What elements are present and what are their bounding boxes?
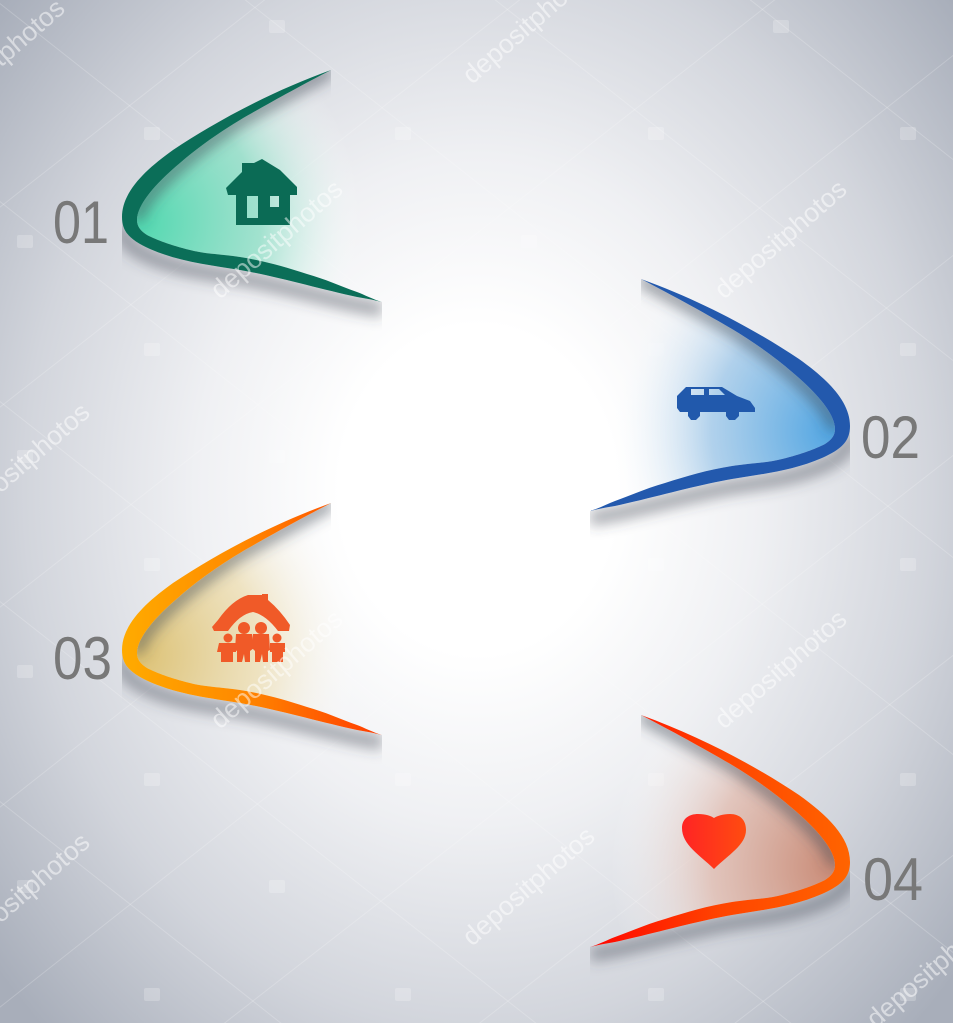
shape 01: curved teal band: [122, 70, 382, 310]
watermark text: depositphotos: [708, 604, 852, 735]
panel 03: family: [53, 503, 382, 743]
panel 04: health: [590, 715, 923, 955]
icon: heart: [682, 814, 746, 869]
watermark text: depositphotos: [456, 391, 600, 522]
icon: house: [226, 159, 297, 225]
number 02: 02: [861, 404, 920, 471]
panel 01: housing: [53, 70, 382, 310]
shape 04: curved red band: [590, 715, 850, 955]
icon: car: [677, 387, 755, 420]
shape 03: curved orange band: [122, 503, 382, 743]
number 01: 01: [53, 189, 109, 256]
shape 02: curved blue band: [590, 279, 850, 519]
number 03: 03: [53, 625, 112, 692]
panel 02: car: [590, 279, 920, 519]
watermark text: depositphotos: [204, 604, 348, 735]
icon: family under roof: [212, 594, 290, 662]
watermark text: depositphotos: [456, 821, 600, 952]
number 04: 04: [863, 846, 923, 913]
watermark text: depositphotos: [204, 174, 348, 305]
watermark text: depositphotos: [708, 174, 852, 305]
